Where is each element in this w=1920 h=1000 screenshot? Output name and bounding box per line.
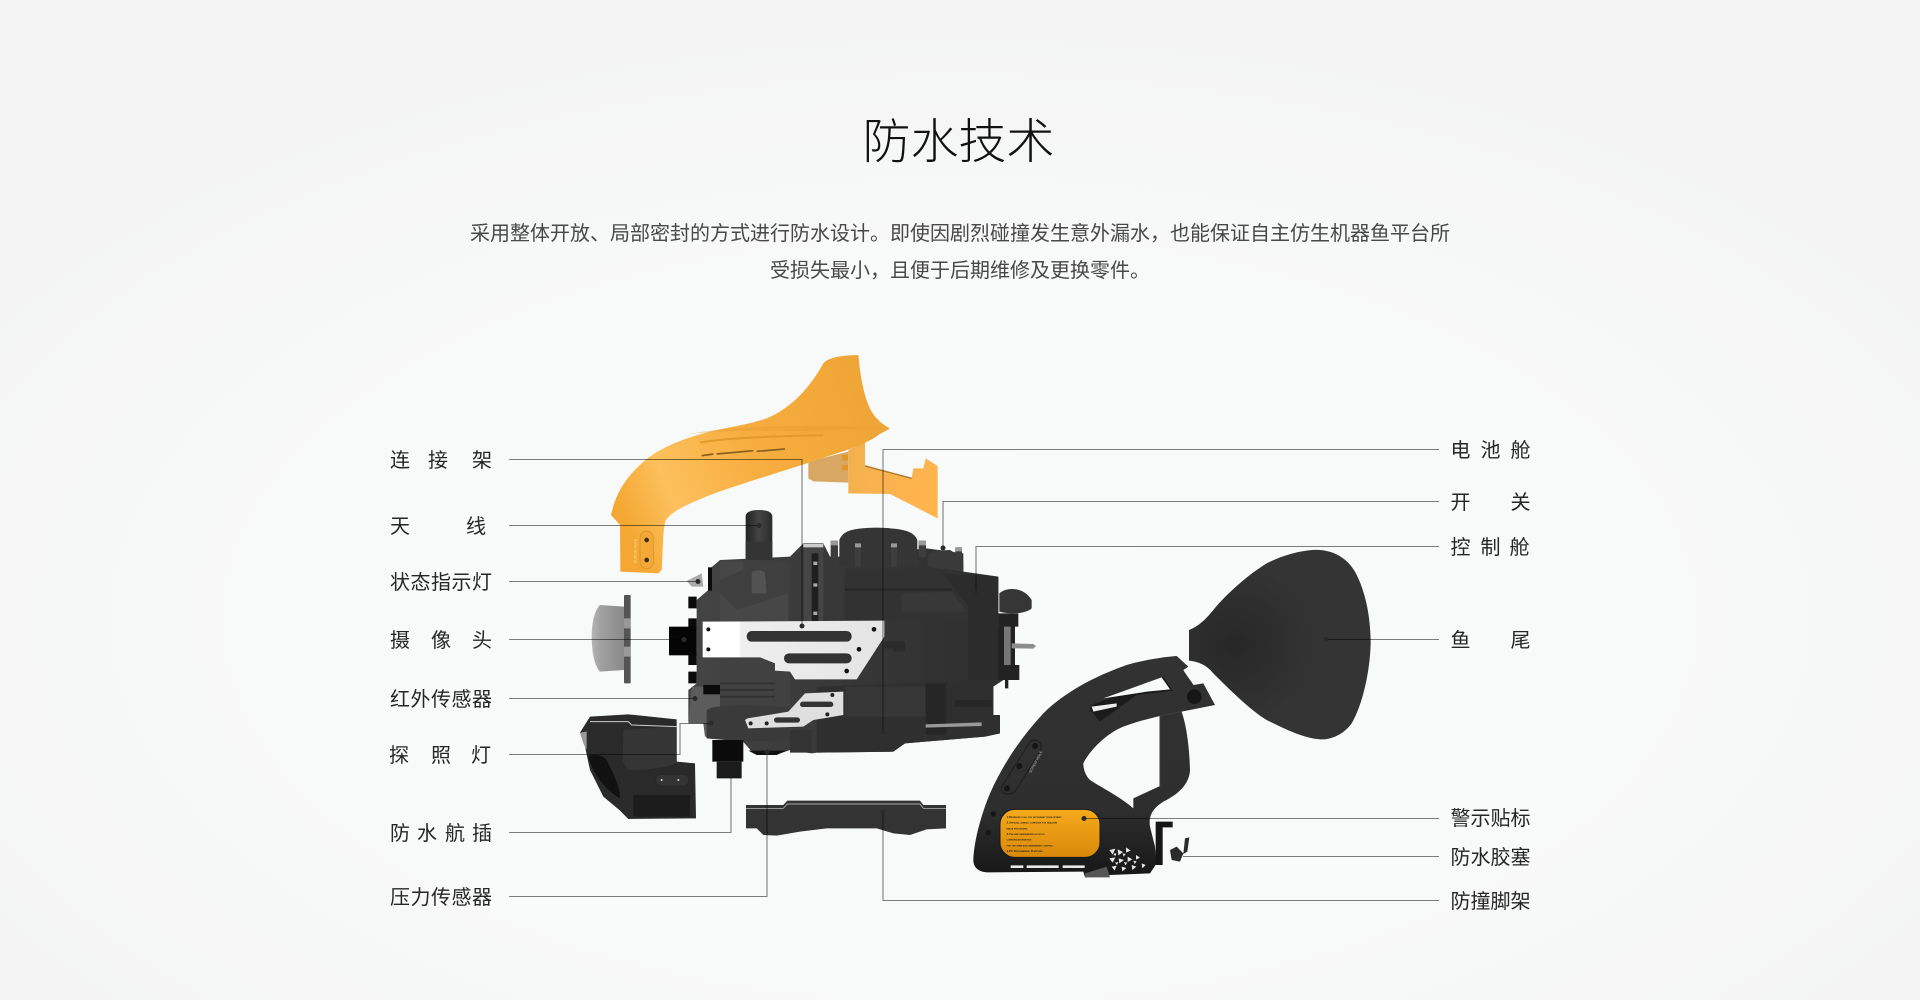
white vents [1011, 865, 1085, 868]
warning sticker: 3.The mini underwater acoustic [1007, 832, 1045, 836]
labels right [1450, 439, 1530, 913]
left body facets [720, 562, 788, 627]
labels right: 防水胶塞 [1450, 846, 1530, 869]
labels right: 防撞脚架 [1450, 890, 1530, 913]
labels left: 摄像头 [390, 629, 492, 652]
rubber plug [1170, 837, 1189, 862]
lower module [817, 680, 1000, 753]
warning sticker [1000, 809, 1100, 857]
title: 防水技术 [862, 116, 1055, 169]
warning sticker: communicationdevice [1007, 838, 1032, 842]
labels left [389, 449, 492, 909]
status light [687, 573, 703, 587]
description text: 采用整体开放、局部密封的方式进行防水设计。即使因剧烈碰撞发生意外漏水，也能保证自主仿生机器鱼平台所 [470, 222, 1450, 245]
cover screws [831, 541, 962, 567]
warning sticker: for the wireless underwater control; [1007, 843, 1054, 847]
labels right: 警示贴标 [1450, 807, 1530, 830]
fish tail shell [973, 656, 1215, 877]
labels left: 防水航插 [390, 822, 492, 845]
labels right: 开关 [1450, 491, 1530, 514]
camera lens cover [592, 595, 631, 683]
control and battery module body [669, 528, 1036, 778]
anti-collision foot [746, 801, 946, 836]
labels left: 探照灯 [389, 744, 491, 767]
yellow connector bracket part [808, 442, 938, 518]
labels left: 红外传感器 [390, 688, 492, 711]
labels left: 压力传感器 [390, 886, 492, 909]
warning sticker: 1.Reserved plug for secondary development. [1007, 815, 1062, 819]
upper body shading [845, 568, 968, 620]
warning sticker: 2.Aspecial albedo computer for realtime [1007, 820, 1058, 824]
vertical strut [804, 547, 823, 627]
waterproof connector [712, 740, 743, 762]
yellow shroud: SCREW HOLE [634, 538, 638, 563]
mounting bracket [1156, 822, 1173, 865]
upper window [1090, 677, 1173, 722]
screw slot [1001, 740, 1041, 794]
labels left: 天线 [390, 515, 486, 538]
labels right: 控制舱 [1450, 536, 1530, 559]
labels left: 状态指示灯 [390, 571, 492, 594]
warning sticker: image processing. [1007, 826, 1028, 830]
camera [669, 627, 697, 655]
labels left: 连接架 [390, 449, 492, 472]
labels right: 电池舱 [1450, 439, 1530, 462]
mesh vent [1109, 847, 1146, 871]
fish tail shell: SCREW HOLE [1028, 750, 1044, 774]
leader lines right [880, 450, 1439, 900]
black connectors [688, 597, 697, 683]
description text [470, 222, 1450, 282]
infrared and light block [688, 687, 720, 737]
labels right: 鱼尾 [1450, 629, 1530, 652]
warning sticker: 4.PC Programming Platform. [1007, 849, 1043, 853]
switch [928, 550, 963, 572]
searchlight housing [580, 714, 696, 819]
top cover [839, 528, 917, 567]
yellow shroud [611, 355, 890, 573]
fish tail [1189, 550, 1371, 739]
right neck and rod [998, 613, 1019, 688]
white plate [703, 621, 884, 679]
leader lines left [509, 460, 804, 896]
antenna [746, 510, 772, 560]
small plate [745, 692, 843, 728]
description text: 受损失最小，且便于后期维修及更换零件。 [770, 259, 1150, 282]
